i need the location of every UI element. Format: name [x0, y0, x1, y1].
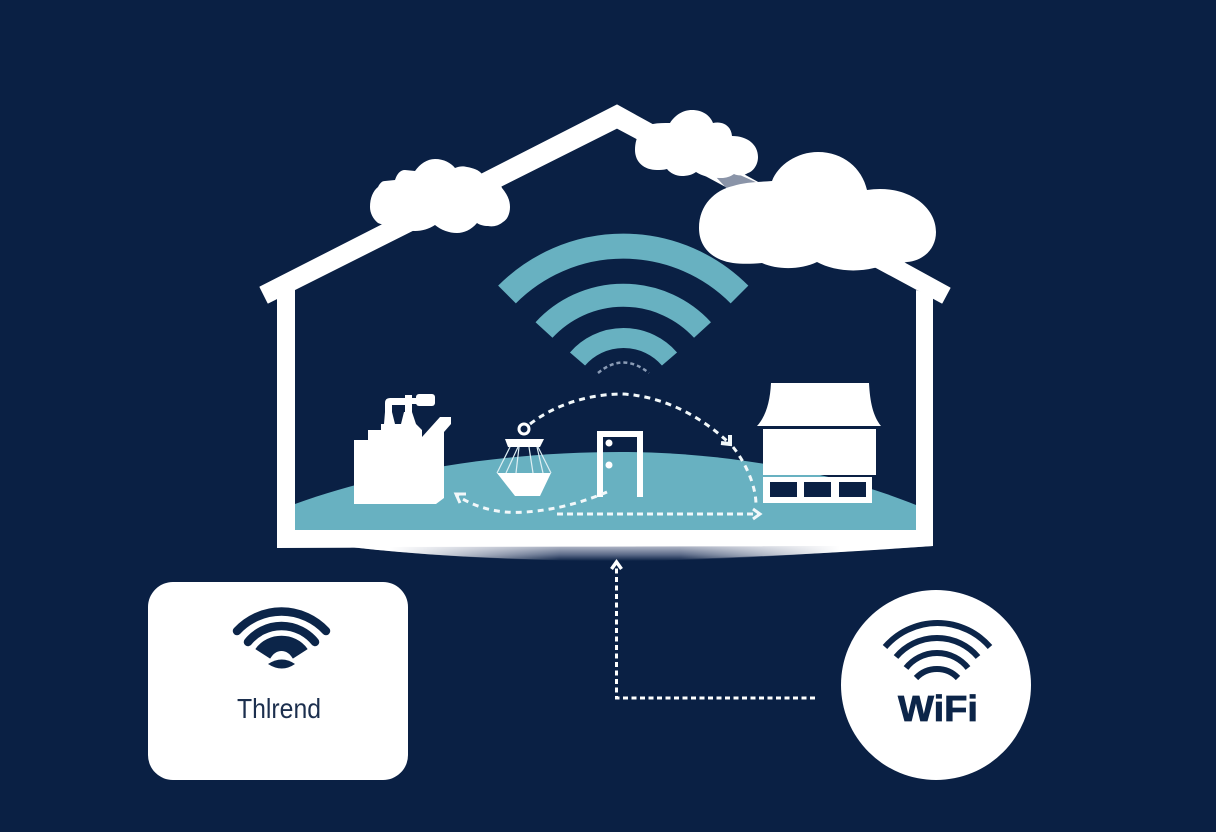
panel: WiFi badge [841, 590, 1031, 780]
large wifi symbol [507, 246, 740, 373]
cloud smear [715, 172, 758, 192]
cloud: middle [635, 110, 758, 178]
icon: door [597, 431, 643, 497]
icon: factory [354, 394, 451, 504]
icon: basket [497, 424, 551, 496]
cloud: right [699, 152, 936, 270]
icon: card wifi [237, 612, 326, 668]
icon: badge wifi [885, 623, 990, 678]
house walls and floor [277, 288, 933, 548]
arrow: wifi badge to house [612, 562, 815, 698]
badge label: WiFi [898, 688, 978, 729]
cloud: left [370, 159, 510, 233]
arrow: dashed connections between devices [456, 394, 760, 519]
panel: Thlrend card [148, 582, 408, 780]
panel: house diagram [260, 105, 950, 561]
icon: house with pagoda roof [757, 383, 881, 503]
floor shadow [350, 545, 933, 561]
card label: Thlrend [237, 693, 321, 724]
house roof [260, 105, 950, 303]
teal ground [295, 452, 916, 531]
